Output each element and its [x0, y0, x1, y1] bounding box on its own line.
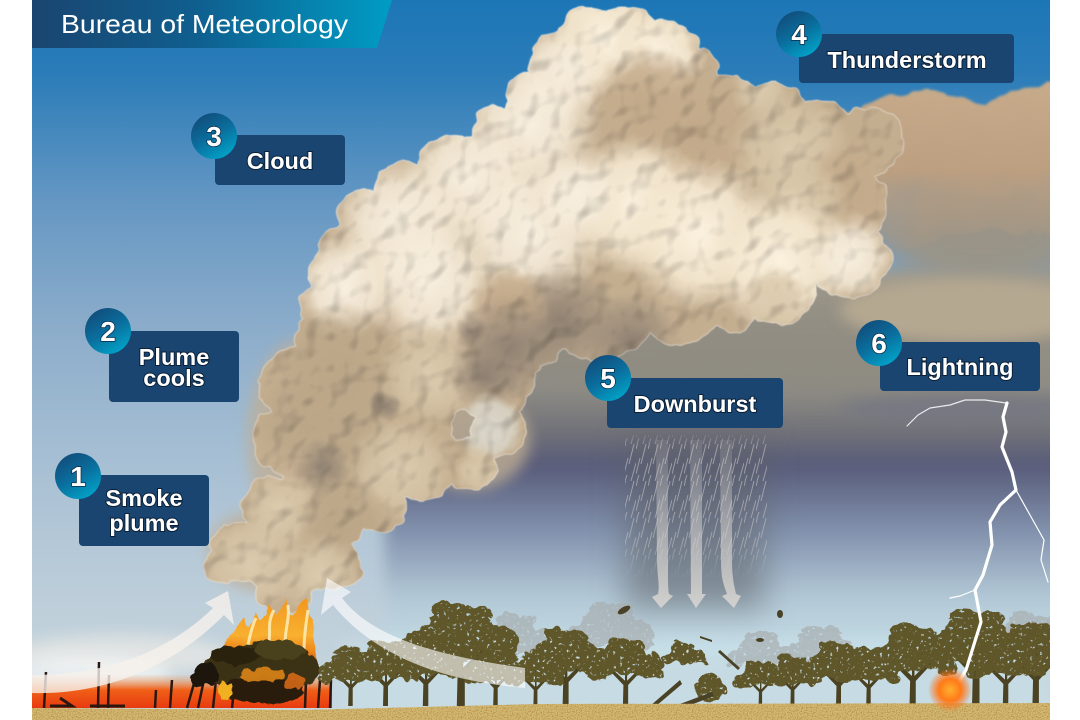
label 1: Smoke plume: 1 [70, 461, 86, 492]
trees: burning dark bush [191, 640, 320, 704]
arrows: downburst [652, 440, 741, 608]
label 6: Lightning: Lightning [906, 354, 1014, 380]
label 1: Smoke plume: Smoke [105, 485, 183, 511]
label 5: Downburst [585, 355, 783, 428]
plume column shading [198, 303, 524, 617]
arrow: inflow from right [321, 578, 525, 688]
label 4: Thunderstorm: 4 [791, 19, 807, 50]
header title: Bureau of Meteorology [61, 9, 348, 39]
label 3: Cloud [191, 113, 345, 185]
shaded mid band [598, 46, 840, 227]
fallen trees and flying debris [616, 604, 783, 706]
distant pale trees [475, 602, 1074, 668]
label 3: Cloud: Cloud [247, 148, 313, 174]
label 4: Thunderstorm: Thunderstorm [827, 47, 987, 73]
burnt trunks [44, 662, 331, 708]
lightning bolt [907, 400, 1048, 685]
label 1: Smoke plume [55, 453, 209, 546]
label 2: Plume cools: Plume [139, 344, 209, 370]
fire: flames [218, 598, 316, 660]
ground: sand [32, 703, 1050, 720]
lightning strike spot fire [928, 668, 972, 712]
cloud: pyrocumulus and smoke plume [198, 0, 920, 620]
header banner [32, 0, 392, 48]
fire: burning ground band [32, 675, 332, 708]
label 5: Downburst: Downburst [634, 391, 757, 417]
label 4: Thunderstorm [776, 11, 1014, 83]
label 2: Plume cools: cools [143, 365, 205, 391]
arrow: inflow from left [32, 591, 234, 693]
upper crest highlights [290, 0, 708, 352]
shadow under main mass [466, 264, 672, 398]
plume soft halo [208, 340, 530, 592]
rain streaks [625, 435, 767, 580]
background: dark storm base [378, 200, 1050, 614]
trees: trunks [340, 642, 1050, 706]
downburst shadow column [625, 440, 765, 610]
label 2: Plume cools [85, 308, 239, 402]
bright tongue [545, 137, 893, 326]
label 6: Lightning: 6 [871, 328, 887, 359]
trees: forest canopy [318, 602, 1080, 702]
label 2: Plume cools: 2 [100, 316, 116, 347]
label 3: Cloud: 3 [206, 121, 222, 152]
cloud: anvil spreading right [846, 80, 1050, 250]
label 6: Lightning [856, 320, 1040, 391]
ground haze and distant smoke [32, 631, 224, 685]
label 1: Smoke plume: plume [109, 510, 179, 536]
label 5: Downburst: 5 [600, 363, 616, 394]
